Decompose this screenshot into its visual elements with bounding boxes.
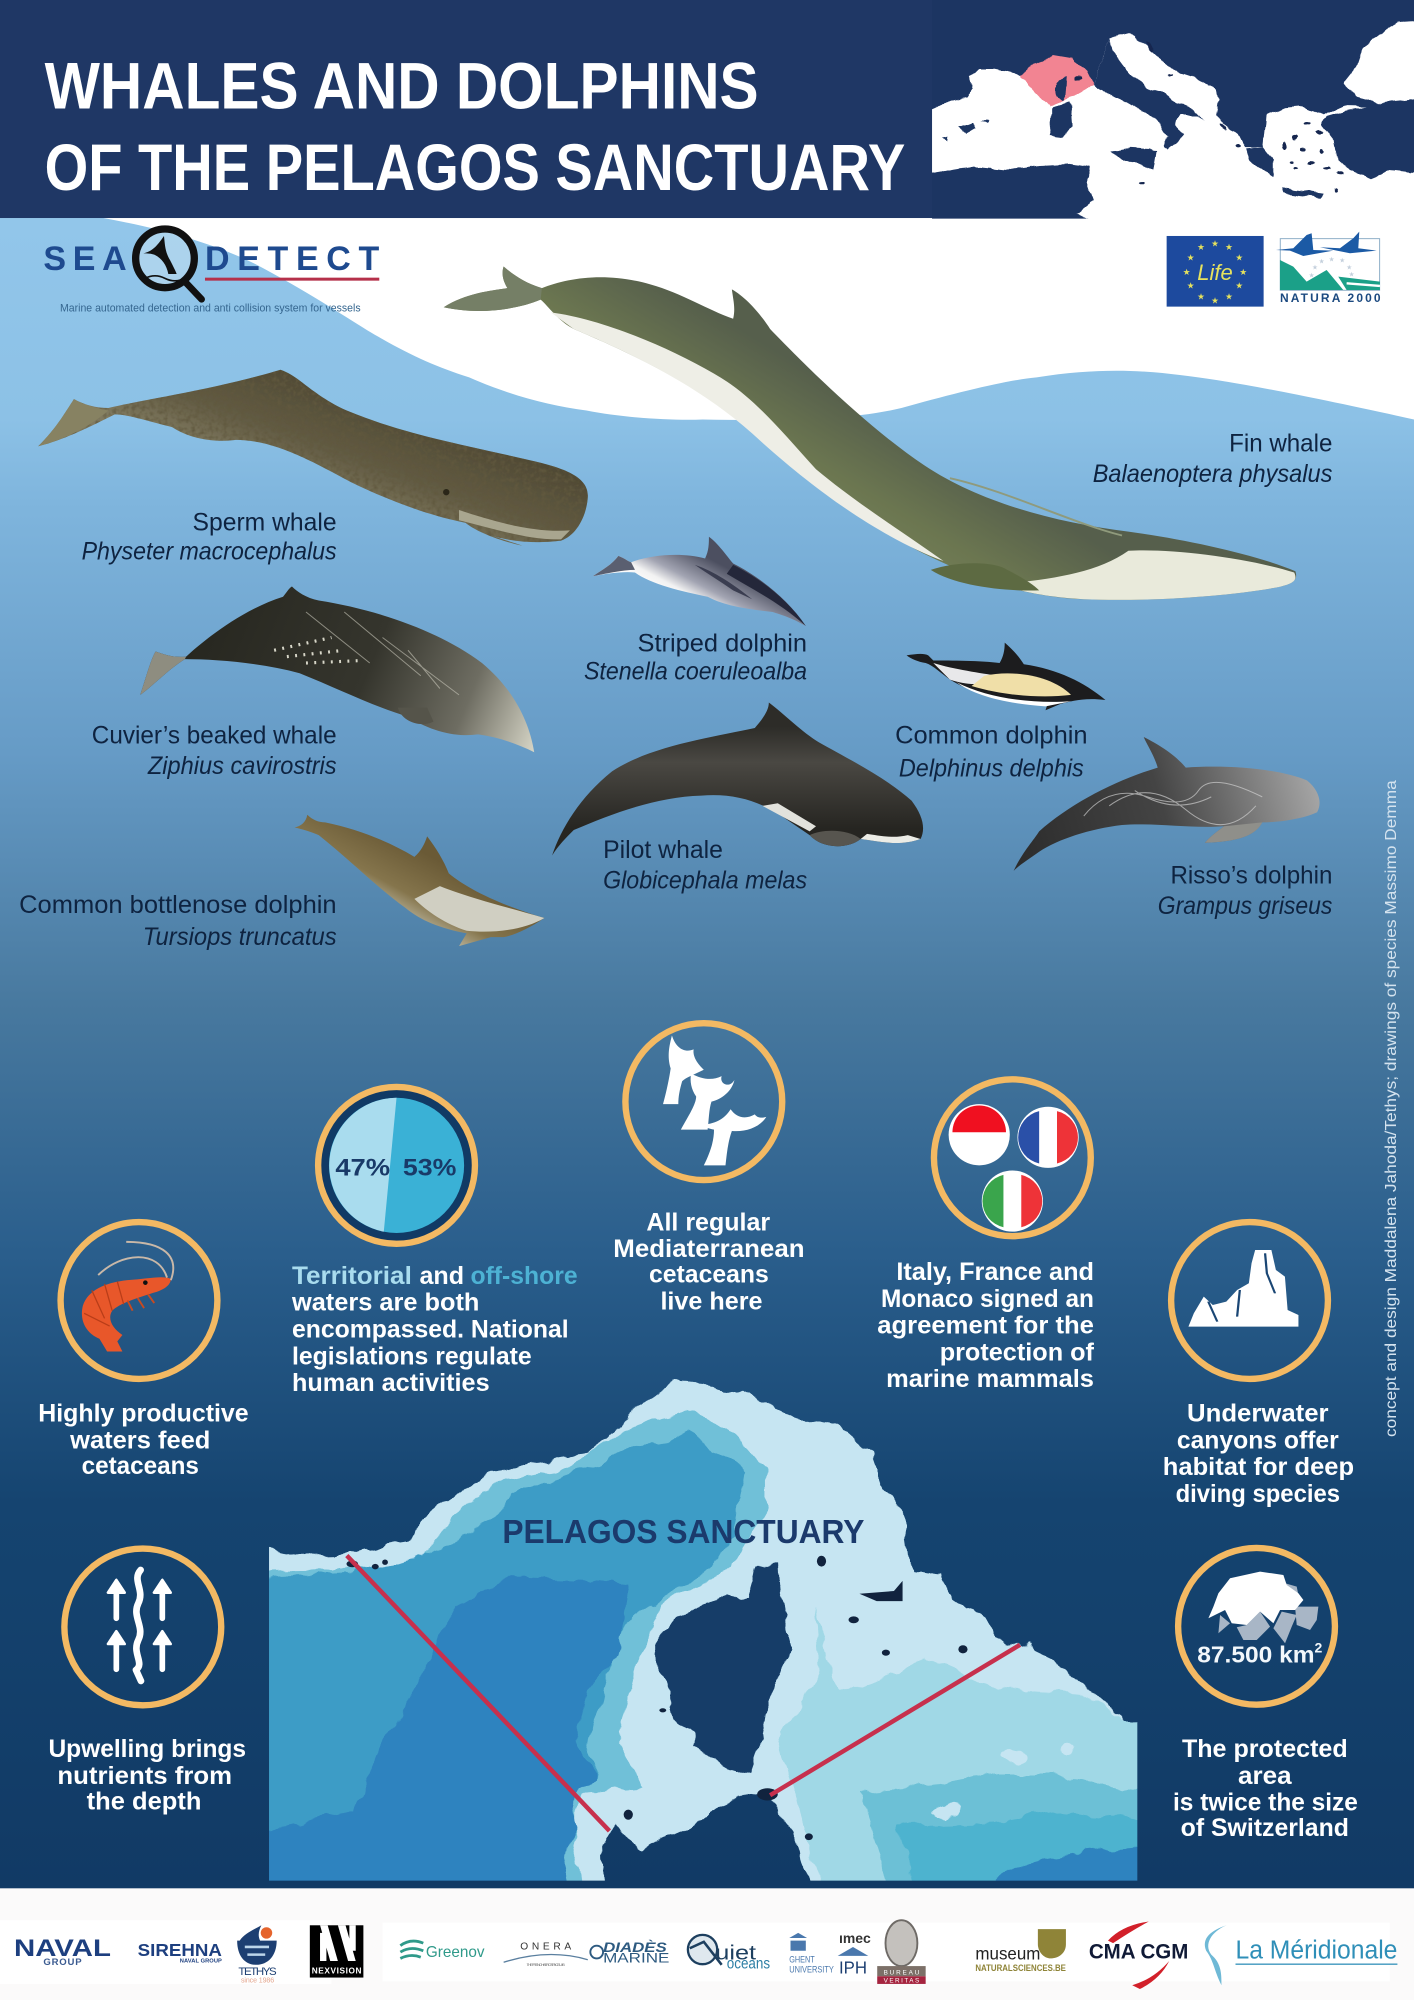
label: striped dolphin: Striped dolphin [638,630,807,658]
label: pilot whale: Pilot whale [603,836,723,864]
flag: Monaco [949,1104,1010,1165]
logo: EU Life: ★ [1187,253,1195,263]
panel: protected area size: is twice the size [1173,1789,1358,1817]
panel: cetaceans: live here [660,1287,762,1315]
label: common dolphin [895,721,1088,782]
red boundary lines [347,1556,1020,1831]
panel: cetaceans: Mediaterranean [613,1235,805,1263]
map: Pelagos Sanctuary bathymetry [244,1381,1170,1903]
title: OF THE PELAGOS SANCTUARY [45,131,905,205]
logo: Naval Group: GROUP [43,1957,82,1968]
Corsica [658,1564,790,1774]
icon: whale tails [625,1023,782,1180]
label: Risso's dolphin: Risso’s dolphin [1170,862,1332,890]
label: Cuvier's beaked whale: Ziphius cavirostris [147,752,337,780]
icon: Switzerland [1178,1548,1335,1705]
logo: Natura 2000: NATURA 2000 [1280,291,1381,305]
logo: EU Life: ★ [1211,239,1219,249]
logo: Quiet Oceans [688,1935,770,1973]
logo: SEA DETECT: Marine automated detection and anti collision system for vessels [60,303,361,315]
label: pilot whale: Globicephala melas [603,867,807,895]
panel: upwelling [48,1549,246,1815]
logo: Bureau Veritas: BUREAU [884,1969,920,1976]
logo: Museum [975,1929,1066,1974]
panel: canyons [1163,1222,1354,1508]
panel: territorial waters: encompassed. National [292,1315,569,1343]
logo: Natura 2000: ★ [1346,264,1352,271]
panel: territorial waters: Territorial [292,1262,412,1290]
panel: canyons: habitat for deep [1163,1453,1354,1481]
logo: imec and IPH: ımec [839,1931,871,1946]
icon: canyon [1171,1222,1328,1379]
panel: cetaceans: cetaceans [649,1261,769,1289]
common dolphin [907,643,1105,710]
logo: Ghent University: GHENT [789,1954,815,1965]
logo: EU Life: ★ [1235,281,1243,291]
logo: EU Life: ★ [1225,242,1233,252]
logo: EU Life: ★ [1211,295,1219,305]
panel: territorial waters [291,1087,578,1397]
striped dolphin [593,537,806,626]
map of the Mediterranean [932,21,1414,219]
label: common dolphin: Common dolphin [895,721,1088,749]
flag: France [1017,1107,1079,1168]
logo: EU Life: ★ [1183,267,1191,277]
Cuvier's beaked whale [140,587,534,752]
panel: protected area size: area [1238,1762,1292,1790]
logo: Greenov: Greenov [426,1944,485,1961]
logo: EU Life: ★ [1187,281,1195,291]
label: common bottlenose dolphin: Tursiops truncatus [143,923,337,951]
logo: imec and IPH: IPH [839,1958,867,1978]
logo: SEA DETECT: DETECT [205,240,380,278]
label: fin whale: Fin whale [1229,429,1332,457]
logo: Bureau Veritas: VERITAS [884,1978,919,1985]
icon: shrimp [61,1222,217,1379]
pilot whale [552,703,923,856]
panel: agreement: agreement for the [877,1312,1094,1340]
logo: Greenov [400,1941,485,1961]
logo: Natura 2000: ★ [1349,272,1355,279]
logo: Nexvision: NEXVISION [312,1967,361,1976]
logo: CMA CGM [1089,1921,1188,1989]
partner logos [0,1920,1397,1989]
logo: Museum: NATURALSCIENCES.BE [975,1963,1066,1974]
logo: Quiet Oceans: uiet [715,1943,756,1965]
flag: Italy [982,1170,1043,1232]
logo: Ghent University: UNIVERSITY [789,1964,834,1975]
panel: canyons: diving species [1176,1480,1340,1508]
logo: SEA DETECT: SEA [43,240,127,278]
label: common bottlenose dolphin [19,891,337,951]
logo: Diades Marine [590,1939,669,1965]
panel: productive waters: Highly productive [38,1400,249,1428]
panel: protected area size [1173,1548,1358,1842]
panel: territorial waters: human activities [292,1369,490,1397]
label: sperm whale: Sperm whale [193,508,337,536]
title: WHALES AND DOLPHINS [45,49,759,123]
logo: Natura 2000: ★ [1309,272,1315,279]
icon: upwelling arrows [64,1549,221,1705]
panel: cetaceans: All regular [646,1208,770,1236]
footer band [0,1888,1414,2000]
panel: agreement: protection of [940,1338,1095,1366]
logo: Naval Group: NAVAL [14,1935,111,1962]
logo: Quiet Oceans: oceans [727,1956,770,1973]
logo: Onera [504,1942,588,1967]
map: Pelagos Sanctuary bathymetry: PELAGOS SANCTUARY [502,1514,864,1551]
label: sperm whale [82,508,337,566]
logo: Tethys: TETHYS [238,1966,277,1978]
logo: Natura 2000: ★ [1339,258,1345,265]
panel: cetaceans [613,1023,805,1315]
label: fin whale [1093,429,1332,488]
logo: Tethys: since 1986 [241,1978,274,1985]
panel: protected area size: of Switzerland [1181,1814,1349,1842]
panel: upwelling: Upwelling brings [48,1735,246,1763]
label: fin whale: Balaenoptera physalus [1093,460,1332,488]
label: common dolphin: Delphinus delphis [899,754,1084,782]
common bottlenose dolphin [295,815,544,946]
label: Risso's dolphin [1158,862,1332,920]
logo: EU Life: ★ [1235,253,1243,263]
logo: EU Life: Life [1197,260,1233,285]
logo: Nexvision [310,1925,363,1978]
logo: Onera: THE FRENCH AEROSPACE LAB [527,1963,565,1967]
logo: Sirehna: SIREHNA [138,1940,222,1960]
logo: Tethys [237,1925,277,1985]
logo: Natura 2000: ★ [1319,258,1325,265]
fin whale [444,266,1296,600]
panel: territorial waters: legislations regulate [292,1342,532,1370]
icon: Switzerland: 87.500 km [1197,1642,1315,1668]
logo: EU Life: ★ [1225,291,1233,301]
logo: imec and IPH [838,1931,871,1978]
panel: productive waters: cetaceans [82,1452,199,1480]
logo: Naval Group [14,1935,111,1968]
logo: Natura 2000: ★ [1329,257,1335,264]
panel: upwelling: nutrients from [57,1762,232,1790]
label: Cuvier's beaked whale: Cuvier’s beaked whale [92,721,337,749]
Risso's dolphin [1014,737,1320,871]
logo: Diades Marine: MARINE [603,1949,669,1965]
panel: productive waters [38,1222,249,1480]
logo: Natura 2000 [1276,232,1381,305]
title [45,49,905,205]
panel: territorial waters: and [419,1262,464,1290]
panel: agreement [877,1079,1095,1393]
panel: productive waters: waters feed [69,1426,210,1454]
logo: Museum: museum [975,1944,1040,1964]
label: common bottlenose dolphin: Common bottlenose dolphin [19,891,337,919]
logo: EU Life: ★ [1197,291,1205,301]
logo: EU Life: ★ [1239,267,1247,277]
header banner [0,0,1414,218]
logo: EU Life: ★ [1197,242,1205,252]
logo: La Meridionale: La Méridionale [1235,1934,1397,1964]
panel: agreement: marine mammals [886,1365,1094,1393]
panel: territorial waters: waters are both [291,1289,479,1317]
label: Risso's dolphin: Grampus griseus [1158,892,1332,920]
panel: canyons: canyons offer [1177,1426,1339,1454]
credit line: concept and design Maddalena Jahoda/Tethys; drawings of species Massimo Demma [1383,780,1400,1437]
logo: Natura 2000: ★ [1312,264,1318,271]
panel: territorial waters: off-shore [470,1262,578,1290]
sperm whale [38,370,588,546]
logo: Sirehna: NAVAL GROUP [180,1958,222,1964]
logo: Ghent University [789,1933,834,1975]
logo: Diades Marine: DIADÈS [603,1939,668,1955]
panel: agreement: Italy, France and [896,1258,1094,1286]
icon: Switzerland: 2 [1315,1639,1323,1655]
panel: protected area size: The protected [1182,1735,1348,1763]
logo: EU Life [1167,236,1264,307]
panel: agreement: Monaco signed an [881,1285,1094,1313]
label: striped dolphin [584,630,807,686]
label: sperm whale: Physeter macrocephalus [82,538,337,566]
logo: Bureau Veritas [877,1920,926,1985]
label: Cuvier's beaked whale [92,721,337,780]
panel: upwelling: the depth [87,1787,201,1815]
panel: canyons: Underwater [1187,1400,1329,1428]
pie chart: 47 / 53: 47% [335,1155,390,1182]
icon: flags [934,1079,1091,1236]
pie chart: 47 / 53 [318,1087,475,1244]
pink Pelagos area [1020,55,1093,107]
logo: CMA CGM: CMA CGM [1089,1938,1188,1963]
label: striped dolphin: Stenella coeruleoalba [584,658,807,686]
logo: Onera: ONERA [520,1942,571,1953]
pie chart: 47 / 53: 53% [403,1155,456,1182]
label: pilot whale [603,836,807,895]
logo: La Meridionale [1205,1925,1397,1985]
white wave [0,218,1414,420]
logo: SEA DETECT [43,229,380,315]
